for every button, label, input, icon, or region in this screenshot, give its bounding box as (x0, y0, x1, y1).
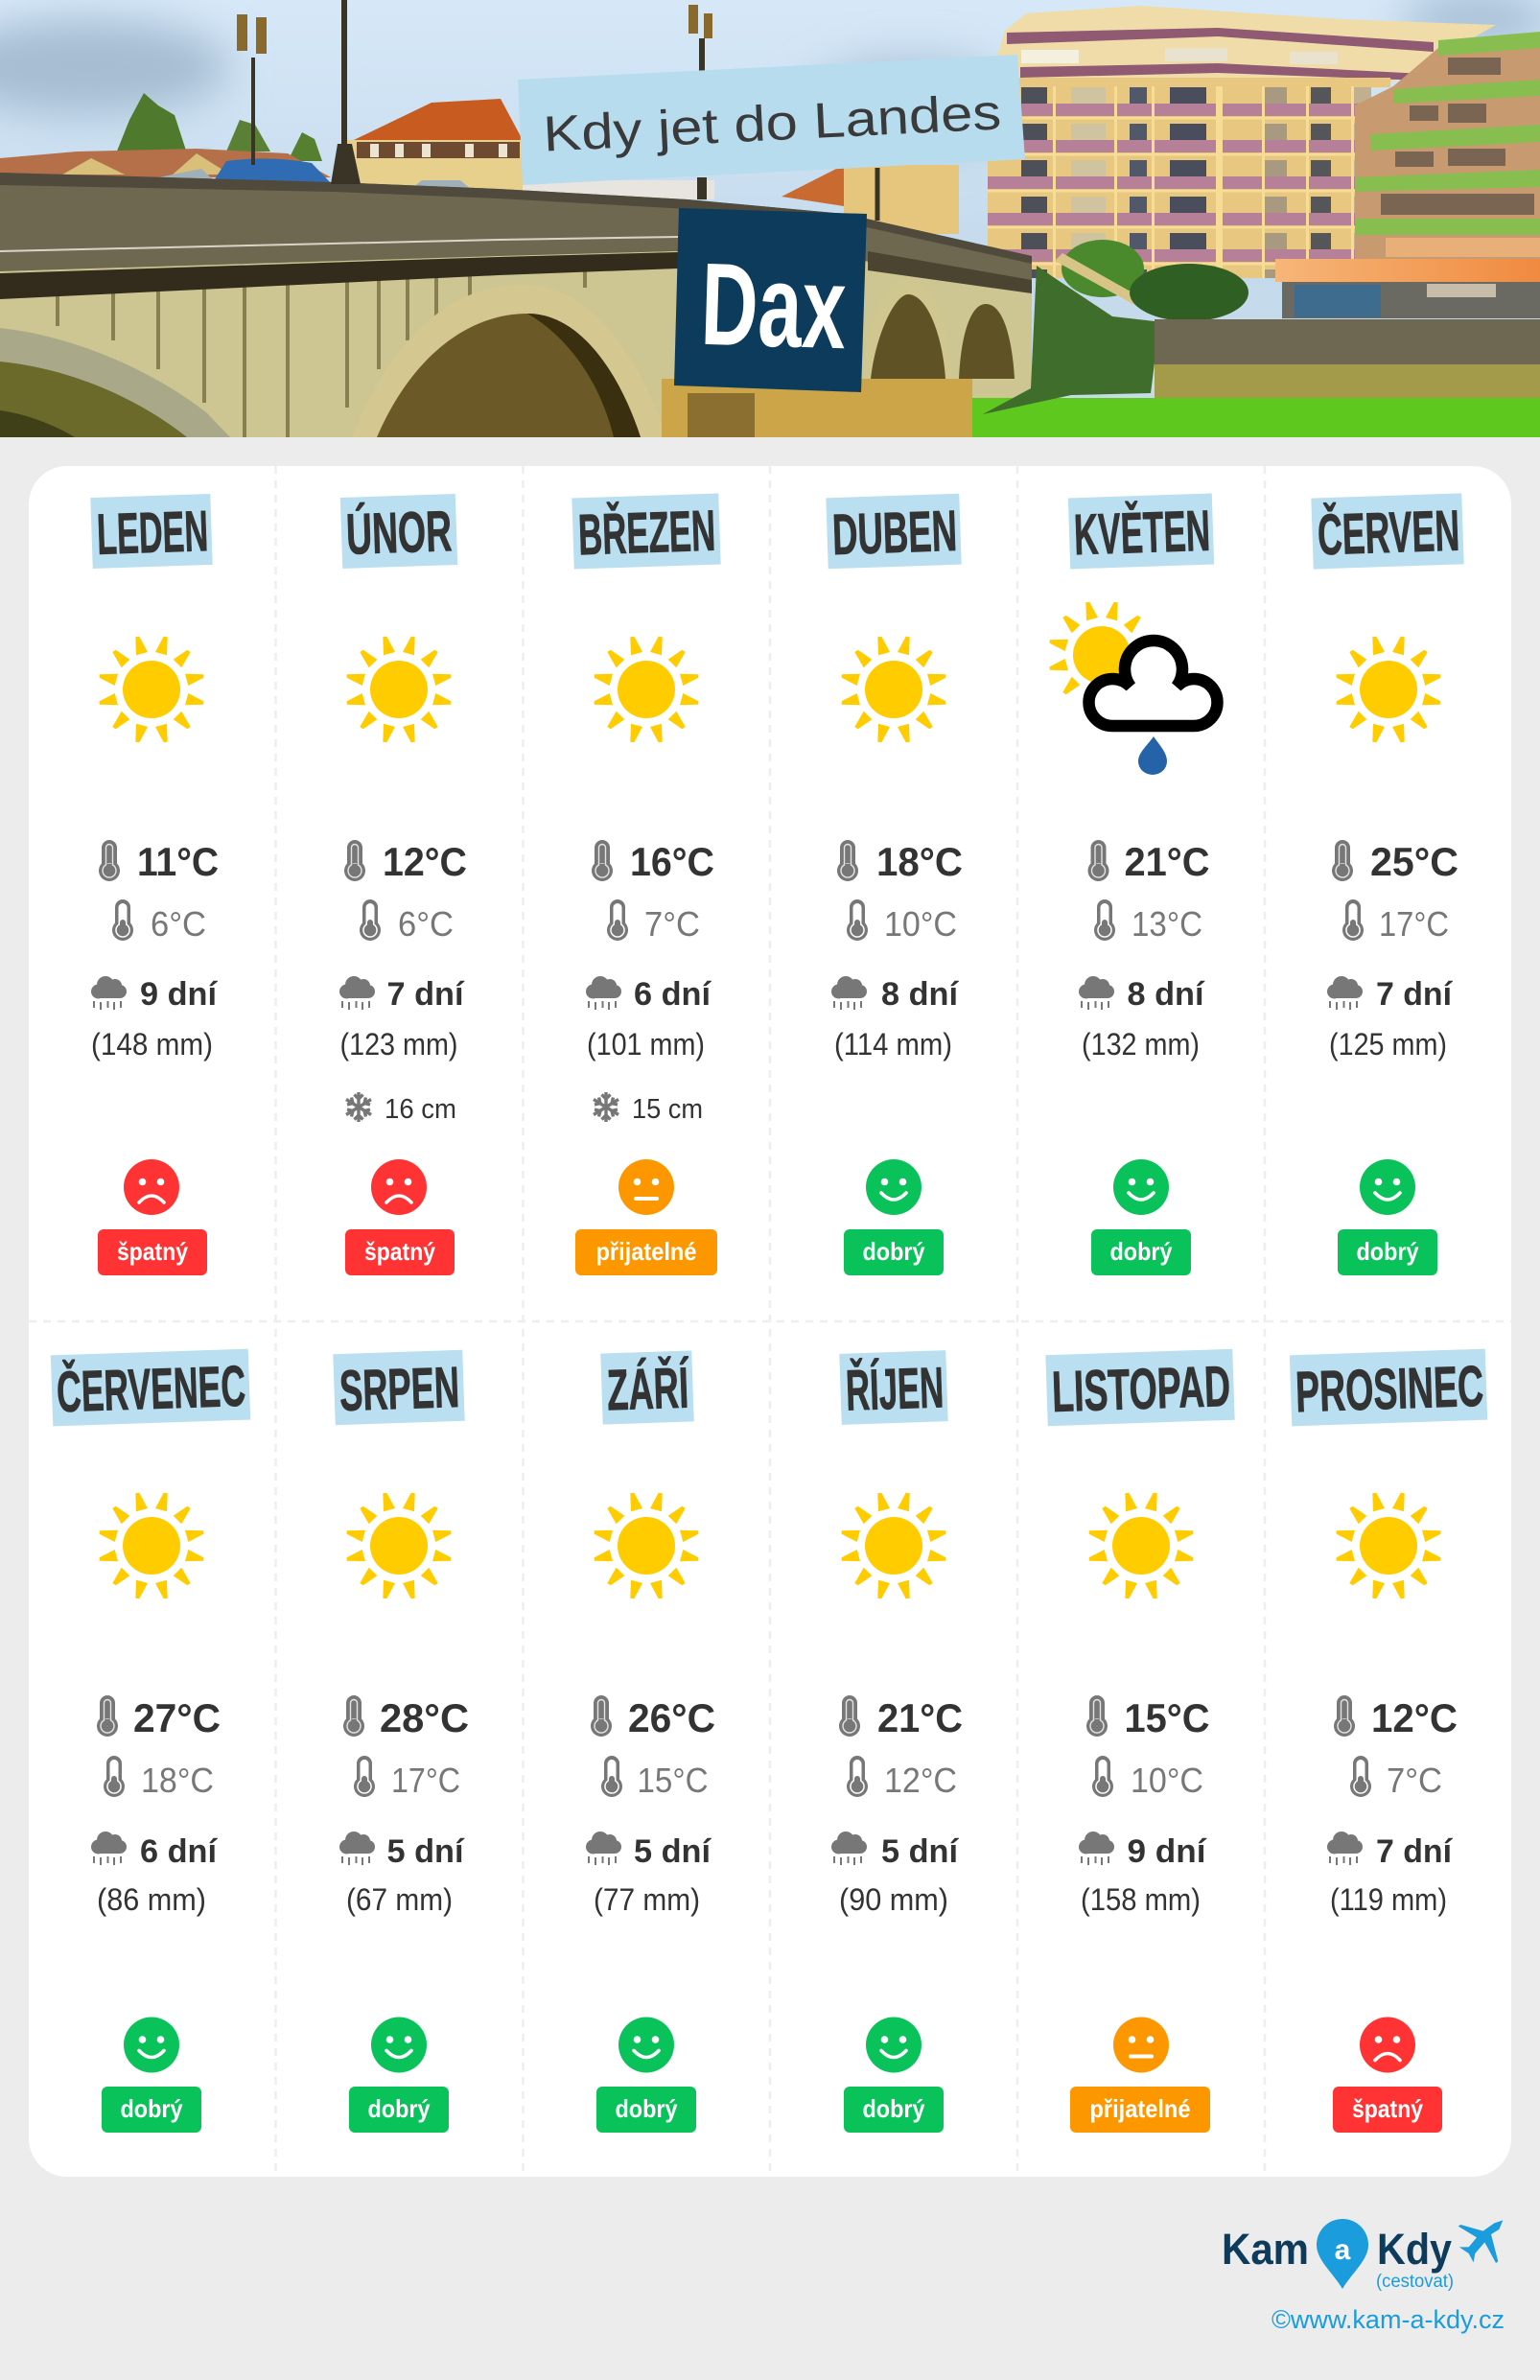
icon: sun (100, 637, 203, 742)
rain days (339, 976, 465, 1013)
min temperature (1342, 899, 1449, 944)
rating face (1360, 2018, 1415, 2073)
right arches (863, 278, 951, 379)
rain days (1327, 976, 1454, 1013)
min temperature (847, 899, 957, 944)
rain days: 7 dní (1376, 1833, 1454, 1870)
month heading: ŘÍJEN (845, 1355, 945, 1423)
max temperature (591, 1695, 715, 1740)
precipitation: (123 mm) (339, 1027, 458, 1062)
month heading (1311, 493, 1464, 570)
max temperature: 11°C (137, 839, 219, 884)
rain days: 5 dní (881, 1833, 960, 1870)
rating badge: dobrý (863, 2094, 925, 2123)
rain days (91, 976, 219, 1013)
precipitation: (86 mm) (97, 1882, 206, 1917)
icon: airplane (1458, 2220, 1503, 2263)
panel: květen (1050, 494, 1218, 1275)
piers (662, 379, 972, 437)
apartment building: upper floors (988, 6, 1496, 88)
rating face (371, 1159, 427, 1215)
month heading (51, 1349, 250, 1426)
month heading (572, 493, 721, 570)
river wall (1155, 319, 1540, 367)
rain days: 6 dní (634, 976, 712, 1013)
logo: Kam a Kdy (1222, 2219, 1503, 2292)
rain days (91, 1832, 219, 1870)
min temperature (1092, 1756, 1203, 1800)
rating badge (596, 2087, 696, 2133)
rating badge (102, 2087, 201, 2133)
month heading: ÚNOR (345, 499, 453, 567)
lamp posts (253, 0, 877, 221)
min temperature: 10°C (1131, 1761, 1203, 1800)
rating badge (98, 1229, 207, 1275)
max temperature (1334, 1695, 1458, 1740)
min temperature: 13°C (1132, 904, 1202, 944)
month heading (600, 1350, 694, 1425)
rating face (124, 1159, 179, 1215)
min temperature: 17°C (1379, 904, 1449, 944)
rating face (866, 1159, 922, 1215)
precipitation: (119 mm) (1330, 1882, 1447, 1917)
precipitation: (77 mm) (594, 1882, 700, 1917)
grass (972, 398, 1540, 437)
month heading (90, 494, 213, 569)
icon: sun (595, 637, 698, 742)
rain days (1327, 1832, 1454, 1870)
min temperature (354, 1756, 460, 1800)
rating badge (1338, 1229, 1437, 1275)
logo: Kam a Kdy: Kam (1222, 2225, 1309, 2274)
rain days: 9 dní (140, 976, 219, 1013)
icon: sun (100, 1493, 203, 1598)
min temperature: 6°C (398, 904, 454, 944)
max temperature: 15°C (1124, 1695, 1210, 1740)
month heading: LISTOPAD (1051, 1354, 1231, 1424)
rating badge (1070, 2087, 1210, 2133)
min temperature (104, 1756, 214, 1800)
min temperature (1350, 1756, 1442, 1800)
month heading (340, 494, 457, 569)
logo: Kam a Kdy: a (1335, 2234, 1351, 2266)
max temperature: 18°C (876, 839, 963, 884)
rain days: 8 dní (881, 976, 960, 1013)
month heading: ČERVENEC (56, 1354, 246, 1424)
rating badge: přijatelné (1089, 2094, 1191, 2123)
icon: sun (842, 1493, 945, 1598)
panel: září (586, 1350, 715, 2133)
green building (1355, 38, 1540, 259)
min temperature (847, 1756, 957, 1800)
rating badge (1333, 2087, 1442, 2133)
month heading: BŘEZEN (577, 499, 716, 567)
rain days: 7 dní (387, 976, 465, 1013)
panel: červen (1311, 493, 1464, 1275)
rain days (1079, 1832, 1207, 1870)
rating face (371, 2018, 427, 2073)
max temperature: 21°C (877, 1695, 963, 1740)
rating badge: dobrý (1110, 1237, 1173, 1266)
rain days: 5 dní (387, 1833, 465, 1870)
precipitation: (67 mm) (346, 1882, 453, 1917)
precipitation: (101 mm) (587, 1027, 705, 1062)
rain days: 8 dní (1128, 976, 1205, 1013)
min temperature: 18°C (141, 1761, 214, 1800)
rating badge (1091, 1229, 1191, 1275)
rating badge: dobrý (368, 2094, 431, 2123)
max temperature: 21°C (1124, 839, 1210, 884)
min temperature (607, 899, 700, 944)
panel: červenec (51, 1349, 250, 2133)
month heading: SRPEN (338, 1355, 460, 1423)
rating badge: špatný (364, 1237, 435, 1266)
min temperature: 6°C (151, 904, 206, 944)
header photo: bridge in Dax (0, 0, 1540, 437)
min temperature (1094, 899, 1202, 944)
rating face (124, 2018, 179, 2073)
rating badge: dobrý (121, 2094, 183, 2123)
max temperature: 12°C (1371, 1695, 1458, 1740)
min temperature (112, 899, 206, 944)
rating badge (844, 1229, 944, 1275)
bridge parapet and ledge (0, 173, 1032, 288)
rating badge: špatný (117, 1237, 188, 1266)
main white panel (29, 466, 1511, 2177)
month heading: KVĚTEN (1073, 499, 1211, 567)
rain days (831, 1832, 960, 1870)
max temperature: 26°C (628, 1695, 715, 1740)
precipitation: (114 mm) (834, 1027, 952, 1062)
panel: listopad (1045, 1349, 1235, 2133)
rain days: 7 dní (1376, 976, 1454, 1013)
max temperature (839, 1695, 963, 1740)
panel: srpen (333, 1350, 469, 2133)
max temperature: 12°C (383, 839, 467, 884)
trees and ramp (1062, 240, 1144, 297)
snow (594, 1092, 703, 1125)
rating badge (575, 1229, 717, 1275)
title banner: Dax (699, 239, 848, 373)
max temperature (99, 839, 219, 884)
website url: ©www.kam-a-kdy.cz (1272, 2305, 1505, 2334)
month heading (333, 1350, 465, 1425)
rating badge (349, 2087, 449, 2133)
min temperature: 7°C (1387, 1761, 1442, 1800)
min temperature (360, 899, 454, 944)
icon: sun (1337, 637, 1440, 742)
max temperature: 16°C (630, 839, 714, 884)
rating badge: dobrý (863, 1237, 925, 1266)
icon: sun (1089, 1493, 1193, 1598)
rating badge: dobrý (616, 2094, 678, 2123)
icon: sun (595, 1493, 698, 1598)
panel: říjen (831, 1350, 963, 2133)
precipitation: (90 mm) (839, 1882, 948, 1917)
precipitation: (148 mm) (91, 1027, 213, 1062)
central arch (352, 285, 666, 437)
icon: sun (1337, 1493, 1440, 1598)
min temperature: 15°C (637, 1761, 708, 1800)
month heading (839, 1350, 948, 1425)
subtitle banner (518, 55, 1025, 185)
rating face (1113, 2018, 1169, 2073)
rain days (831, 976, 960, 1013)
month heading: DUBEN (831, 499, 958, 567)
max temperature (837, 839, 963, 884)
min temperature: 17°C (391, 1761, 460, 1800)
ivy (983, 266, 1155, 414)
month heading: ZÁŘÍ (606, 1356, 690, 1422)
rain days (586, 1832, 712, 1870)
rating face (618, 1159, 674, 1215)
rain days: 5 dní (634, 1833, 712, 1870)
panel: duben (826, 494, 963, 1275)
max temperature (344, 839, 467, 884)
rain days (339, 1832, 465, 1870)
logo: Kam a Kdy: (cestovat) (1376, 2272, 1454, 2292)
month heading (1068, 494, 1214, 569)
title banner (674, 208, 867, 392)
month heading: LEDEN (96, 499, 209, 567)
panel: leden (90, 494, 219, 1275)
panel: březen (572, 493, 721, 1275)
rating badge (844, 2087, 944, 2133)
max temperature (1087, 839, 1210, 884)
panel: únor (339, 494, 467, 1275)
precipitation: (125 mm) (1329, 1027, 1447, 1062)
rating face (1113, 1159, 1169, 1215)
apartment building: balcony grid (988, 86, 1371, 278)
max temperature: 25°C (1370, 839, 1458, 884)
rating face (618, 2018, 674, 2073)
bridge wall (0, 251, 1032, 437)
max temperature (97, 1695, 221, 1740)
max temperature (592, 839, 714, 884)
rain days (586, 976, 712, 1013)
panel: prosinec (1290, 1349, 1487, 2133)
month heading (826, 494, 962, 569)
snow (346, 1092, 456, 1125)
rating badge: přijatelné (596, 1237, 696, 1266)
min temperature: 12°C (884, 1761, 957, 1800)
rain days (1079, 976, 1205, 1013)
precipitation: (132 mm) (1082, 1027, 1200, 1062)
min temperature: 10°C (884, 904, 957, 944)
rating face (1360, 1159, 1415, 1215)
rating badge: špatný (1352, 2094, 1423, 2123)
snow: 15 cm (632, 1094, 703, 1125)
subtitle banner: Kdy jet do Landes (542, 84, 1002, 163)
rating badge (345, 1229, 455, 1275)
min temperature (601, 1756, 708, 1800)
left arch (0, 328, 230, 437)
icon: location pin (1317, 2219, 1368, 2289)
min temperature: 7°C (644, 904, 700, 944)
logo: Kam a Kdy: Kdy (1377, 2225, 1452, 2274)
max temperature: 27°C (133, 1695, 221, 1740)
precipitation: (158 mm) (1081, 1882, 1201, 1917)
rating badge: dobrý (1356, 1237, 1419, 1266)
max temperature (1332, 839, 1458, 884)
rating face (866, 2018, 922, 2073)
storefront (1275, 259, 1540, 282)
icon: sun behind rain cloud (1050, 602, 1218, 775)
month heading (1045, 1349, 1235, 1426)
rain days: 6 dní (140, 1833, 219, 1870)
max temperature (1086, 1695, 1210, 1740)
icon: sun (347, 1493, 451, 1598)
max temperature: 28°C (380, 1695, 469, 1740)
snow: 16 cm (385, 1094, 456, 1125)
icon: sun (347, 637, 451, 742)
icon: sun (842, 637, 945, 742)
rain days: 9 dní (1128, 1833, 1207, 1870)
